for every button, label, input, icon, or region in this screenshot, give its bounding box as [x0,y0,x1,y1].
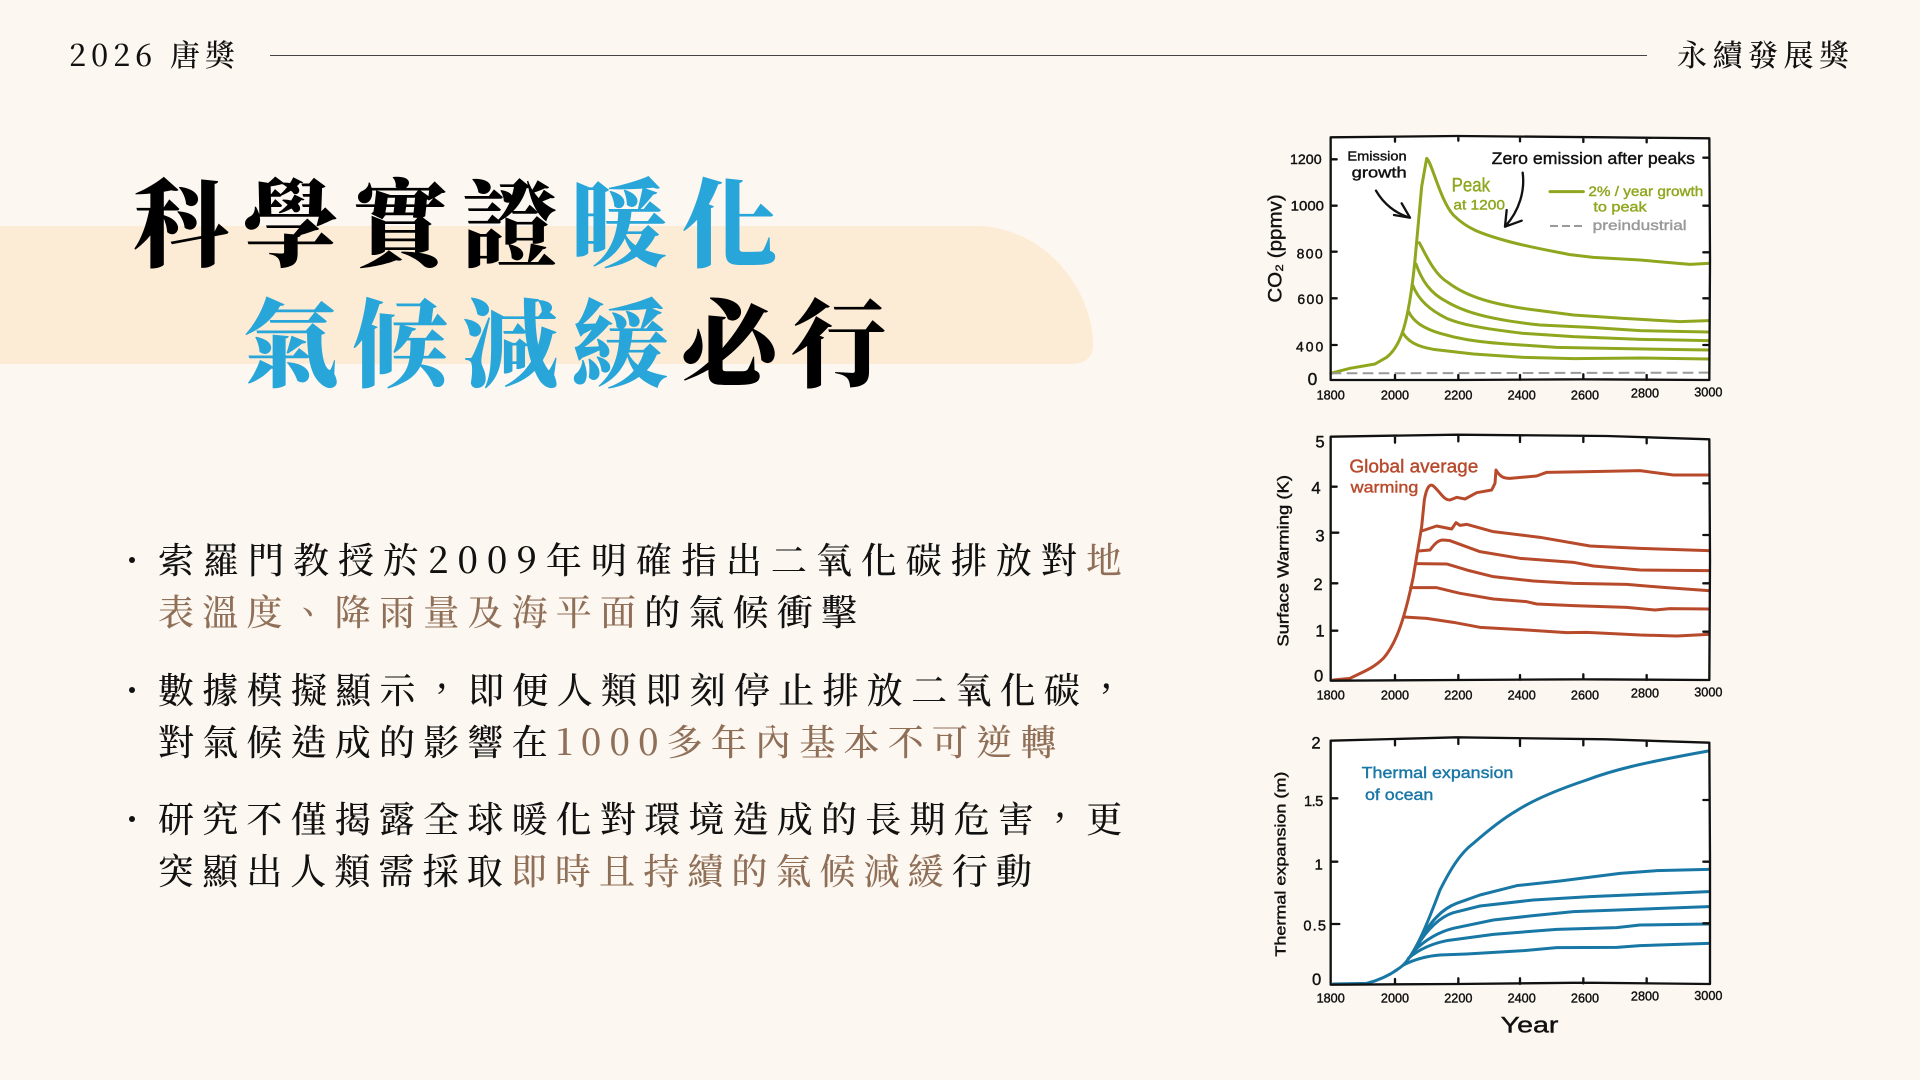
annotation: peak at 1200: Peak [1452,176,1490,197]
thermal x labels: 2800 [1631,990,1659,1004]
annotation: emission growth [1347,149,1410,218]
warming annotation: warming [1350,480,1418,497]
title line 2: 氣候減緩必行 [243,293,901,400]
CO2 y labels: 1000 [1291,198,1324,214]
warming axis title: Surface Warming (K) [1276,475,1293,647]
thermal x labels: 2400 [1508,992,1536,1006]
CO2 x labels: 1800 [1317,388,1345,402]
warming y labels: 4 [1311,478,1321,497]
CO2 axis title: CO₂ (ppmv) [1266,194,1287,303]
bullet 1 [129,533,1131,636]
thermal y labels: 0.5 [1303,919,1326,935]
CO2 x labels [1317,386,1722,402]
warming y labels: 0 [1314,667,1323,686]
thermal x labels: 3000 [1694,989,1722,1003]
warming x labels: 3000 [1694,686,1722,700]
CO2 x labels: 2800 [1631,386,1659,400]
header right: 永續發展獎: 永續發展獎 [1677,31,1854,75]
preindustrial dashed line [1331,370,1709,376]
bullet 3 line 1: 研究不僅揭露全球暖化對環境造成的長期危害，更 [158,792,1130,843]
legend: to peak [1593,198,1648,214]
warming y labels: 1 [1315,622,1325,641]
title line 1: 科學實證暖化 [133,173,791,280]
annotation: zero emission after peaks: Zero emission after peaks [1492,149,1695,168]
warming frame and ticks [1331,435,1710,681]
header rule [270,54,1647,56]
thermal annotation: Thermal expansion [1362,765,1513,782]
warming annotation [1349,456,1478,497]
CO2 y labels: 400 [1296,339,1324,355]
annotation: emission growth: Emission [1347,149,1407,164]
thermal annotation [1362,765,1513,804]
bullet 3 [129,792,1130,895]
thermal x labels: 1800 [1317,992,1345,1006]
thermal y labels: 2 [1311,733,1321,752]
warming y labels: 3 [1315,527,1325,546]
warming annotation: Global average [1349,456,1478,477]
warming y labels: 2 [1313,575,1323,594]
CO2 curves [1331,158,1708,373]
thermal annotation: of ocean [1365,787,1433,804]
CO2 x labels: 2400 [1508,388,1536,402]
bullet 2 line 1: 數據模擬顯示，即便人類即刻停止排放二氧化碳， [158,663,1133,714]
warming y labels: 5 [1315,432,1325,451]
thermal curves [1333,751,1708,984]
bullet 3 line 2: 突顯出人類需採取即時且持續的氣候減緩行動 [158,844,1040,895]
bullet 2 [129,663,1133,766]
bullet 1 line 2: 表溫度、降雨量及海平面的氣候衝擊 [158,585,865,636]
bullet 2 dot [129,687,135,693]
thermal y labels [1303,733,1326,989]
CO2 x labels: 2200 [1444,388,1472,402]
annotation: emission growth: growth [1352,165,1407,181]
CO2 y labels: 800 [1297,245,1323,261]
thermal x labels: 2000 [1381,992,1409,1006]
bullet 1 dot [129,557,135,563]
bullet 1 line 1: 索羅門教授於2009年明確指出二氧化碳排放對地 [158,533,1131,584]
thermal frame and ticks [1331,737,1710,985]
thermal x labels: 2200 [1444,992,1472,1006]
warming y labels [1311,432,1325,686]
thermal y labels: 1 [1315,857,1323,873]
CO2 y labels [1290,151,1324,389]
chart: surface warming [1276,432,1722,702]
thermal y labels: 0 [1312,970,1321,989]
legend [1550,183,1703,233]
warming x labels [1317,686,1722,702]
annotation: zero emission after peaks [1492,149,1695,227]
title [133,173,901,400]
warming x labels: 2400 [1508,688,1536,702]
CO2 x labels: 3000 [1694,386,1722,400]
warming x labels: 2200 [1444,688,1472,702]
chart: CO2 concentration [1266,136,1722,402]
warming curves [1333,470,1708,680]
CO2 y labels: 600 [1297,291,1324,307]
CO2 frame and ticks [1331,136,1710,380]
CO2 x labels: 2000 [1381,388,1409,402]
warming x labels: 2600 [1571,688,1599,702]
warming x labels: 2000 [1381,688,1409,702]
annotation: peak at 1200: at 1200 [1453,196,1505,212]
thermal y labels: 1.5 [1304,794,1323,810]
CO2 y labels: 1200 [1290,151,1322,167]
warming x labels: 2800 [1631,686,1659,700]
annotation: peak at 1200 [1452,176,1505,212]
warming x labels: 1800 [1317,688,1345,702]
legend: 2% / year growth [1588,183,1703,199]
legend: preindustrial [1593,217,1687,233]
thermal x labels [1317,989,1722,1006]
thermal axis title: Thermal expansion (m) [1273,772,1289,957]
bullet 2 line 2: 對氣候造成的影響在1000多年內基本不可逆轉 [158,715,1065,766]
thermal x labels: 2600 [1571,992,1599,1006]
header left: 2026 唐獎: 2026 唐獎 [69,31,240,75]
bullet 3 dot [129,816,135,822]
CO2 x labels: 2600 [1571,388,1599,402]
x axis title: Year: Year [1501,1013,1558,1038]
chart: thermal expansion [1273,733,1722,1038]
CO2 y labels: 0 [1308,369,1317,389]
